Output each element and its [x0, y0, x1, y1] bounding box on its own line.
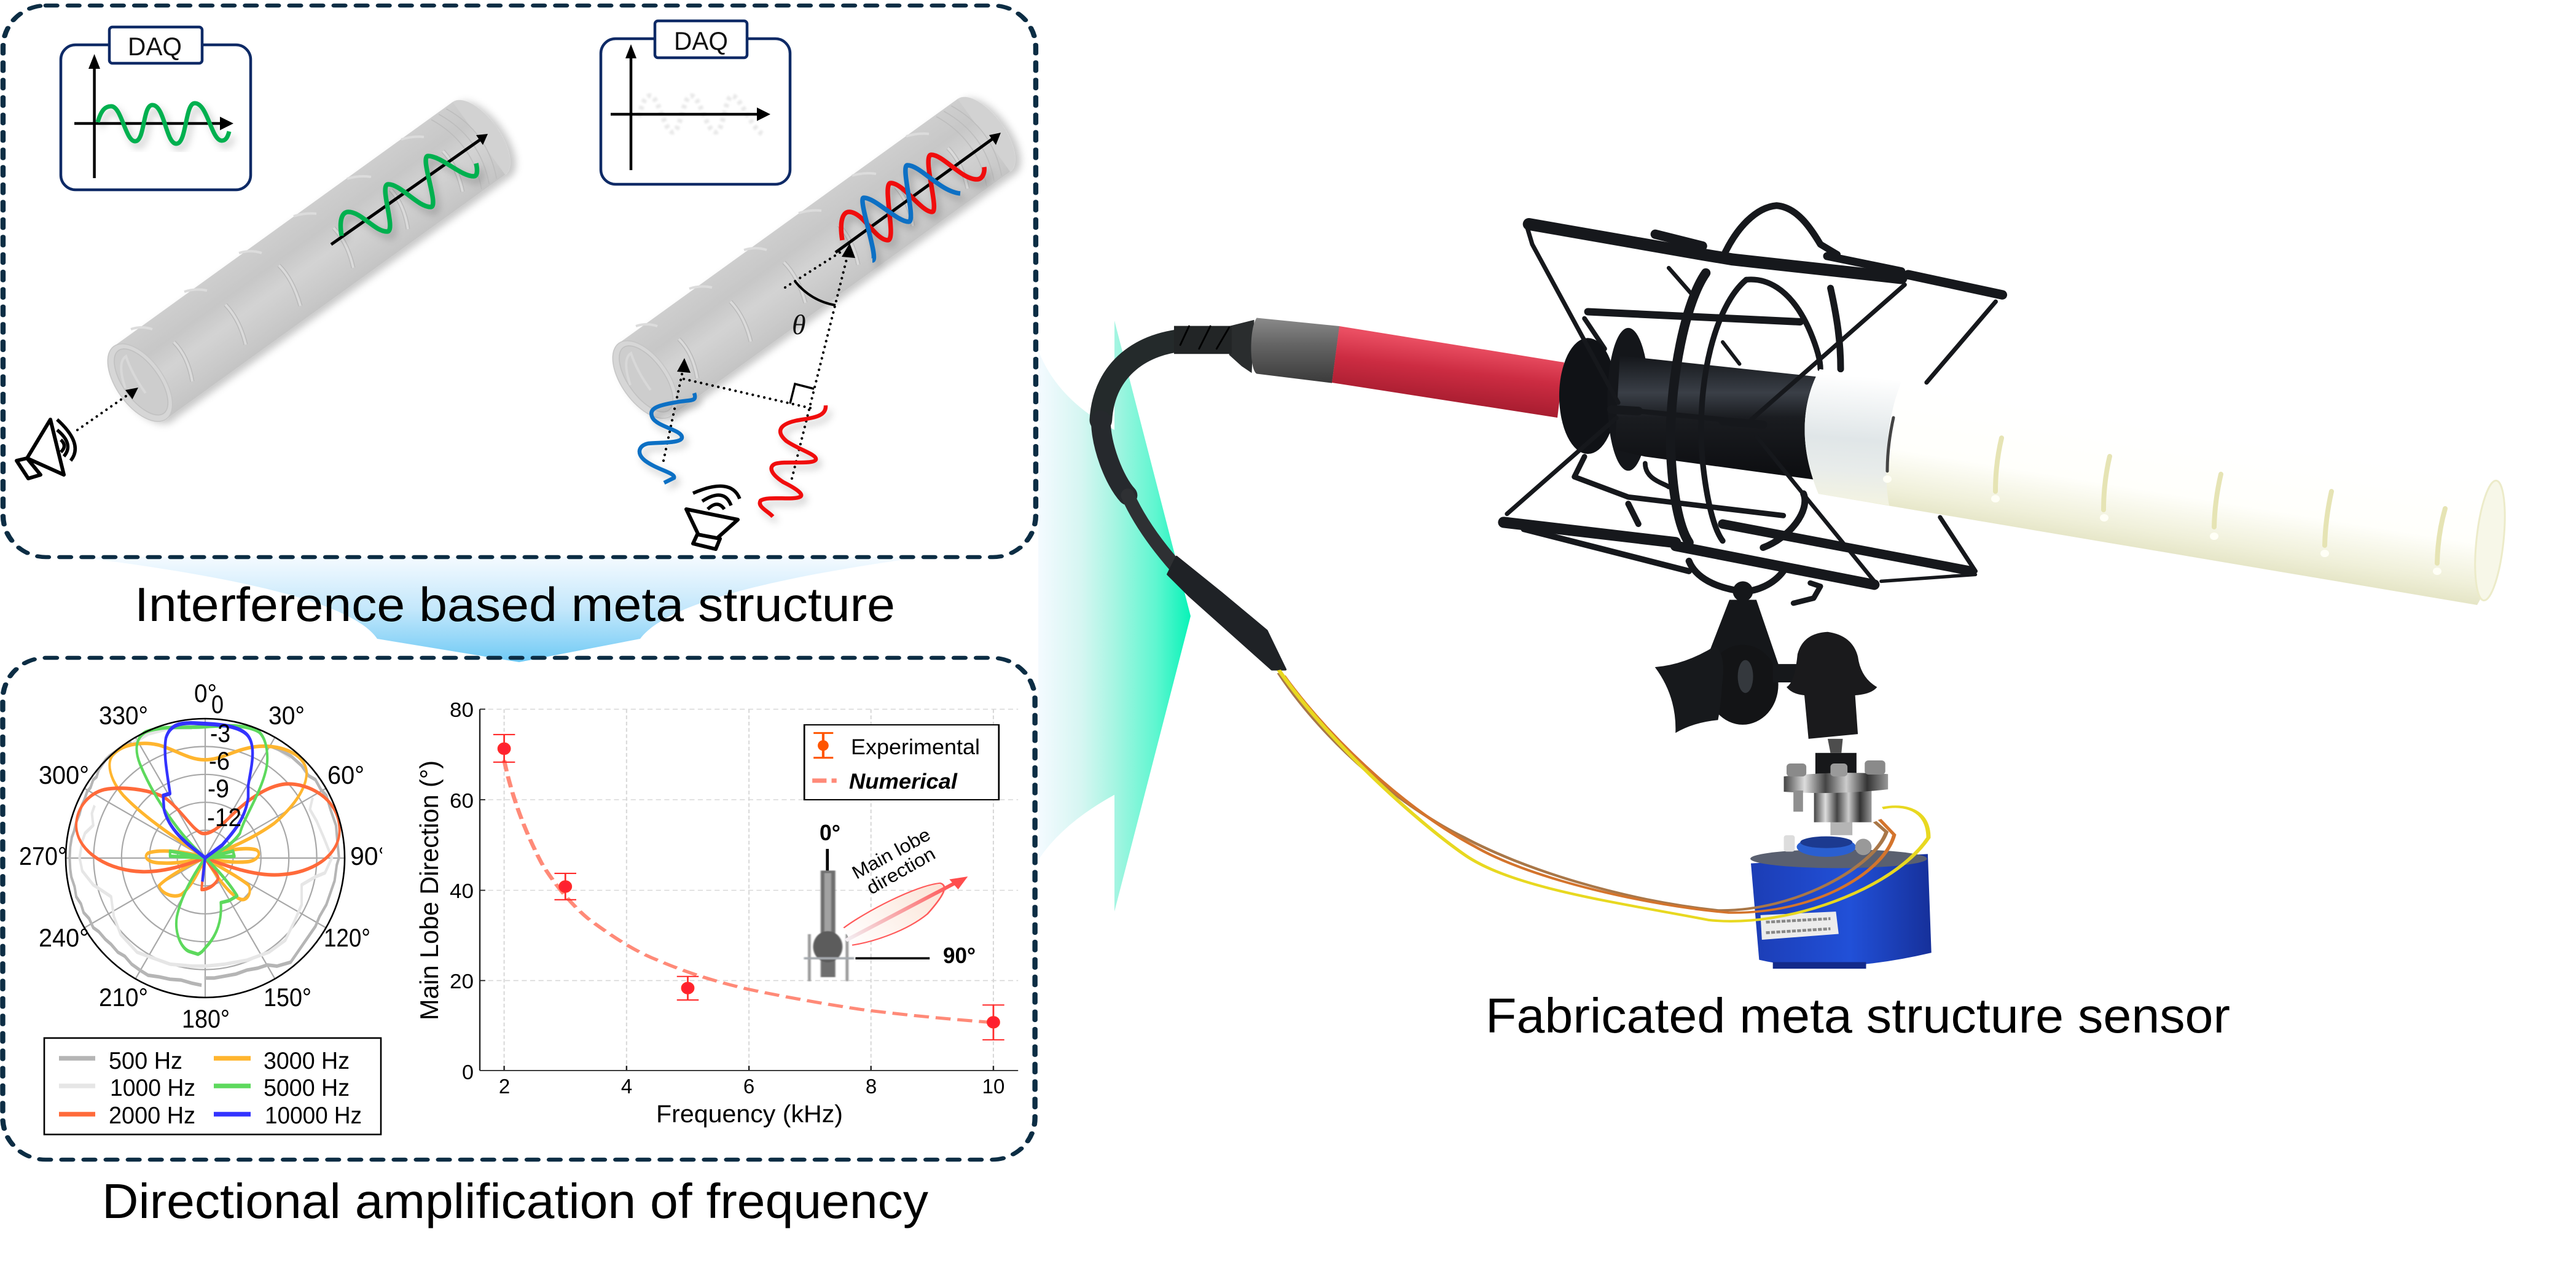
sensor wires — [1279, 670, 1928, 921]
speaker left and dotted arrow — [17, 388, 138, 478]
rear shock mount bars — [1524, 234, 1995, 581]
panel border bottom — [2, 658, 1035, 1160]
curve 1000 Hz — [79, 728, 332, 966]
white tube — [1805, 369, 2510, 605]
inset labels: 90° — [943, 943, 976, 968]
green signal in DAQ — [98, 103, 229, 144]
scatter x tick labels: 8 — [866, 1075, 877, 1098]
panel: interference based meta structure — [3, 6, 1036, 557]
green wave on tube — [340, 156, 477, 236]
polar tick labels: 150° — [264, 983, 311, 1012]
black housing — [1559, 328, 1824, 480]
polar legend: 3000 Hz — [264, 1048, 350, 1074]
funnel arrow: top panel to bottom panel — [80, 557, 922, 662]
scatter x tick labels — [499, 1075, 1004, 1098]
cable — [1101, 326, 1286, 670]
heading: interference based meta structure: Interference based meta structure — [135, 577, 895, 631]
dotted geometry and angle — [664, 243, 855, 478]
polar legend: 10000 Hz — [265, 1103, 362, 1129]
cancelled signal in DAQ — [639, 96, 765, 135]
legend text: Experimental — [851, 735, 980, 759]
scatter y tick labels: 20 — [450, 970, 474, 993]
blue incident wave — [640, 393, 695, 483]
scatter x tick labels: 10 — [982, 1075, 1004, 1098]
DAQ label left: DAQ — [128, 32, 182, 61]
polar outer circle — [66, 719, 345, 997]
red body — [1332, 326, 1564, 418]
polar chart — [19, 679, 388, 1134]
DAQ box right — [601, 21, 790, 184]
inset labels — [820, 820, 976, 968]
polar legend: 500 Hz — [109, 1048, 182, 1074]
icon: speaker right — [686, 486, 740, 549]
scatter y tick labels: 0 — [462, 1061, 474, 1083]
polar tick labels: 30° — [268, 701, 305, 730]
polar tick labels: -3 — [210, 719, 230, 748]
tube slots — [1887, 418, 2445, 563]
inset labels: 0° — [820, 820, 840, 845]
arrow through right tube — [836, 133, 1001, 252]
big arrow: panels to fabricated sensor — [1038, 321, 1191, 912]
DAQ label left — [109, 27, 202, 63]
polar tick labels: 300° — [39, 760, 89, 789]
slots right — [626, 134, 968, 390]
scatter chart: main lobe direction vs frequency — [415, 698, 1018, 1128]
DAQ label right — [655, 21, 747, 58]
inset labels: direction — [863, 843, 939, 899]
scatter y tick labels: 40 — [450, 880, 474, 902]
silver stem and blue collar — [1784, 821, 1871, 857]
scatter legend box — [804, 725, 999, 800]
x axis title: Frequency (kHz) — [656, 1101, 843, 1128]
polar tick labels — [19, 679, 388, 1033]
photo: fabricated meta structure sensor — [1101, 206, 2510, 969]
scatter x tick labels: 6 — [743, 1075, 754, 1098]
polar tick labels: 60° — [327, 760, 364, 789]
dome knob — [1787, 632, 1877, 739]
polar tick labels: 270° — [19, 841, 67, 870]
heading: fabricated meta structure sensor: Fabricated meta structure sensor — [1486, 988, 2230, 1043]
polar tick labels: 0° — [194, 679, 217, 708]
polar curves — [69, 723, 340, 985]
curve 2000 Hz — [76, 784, 340, 889]
numerical fit curve — [504, 760, 993, 1023]
polar legend — [44, 1038, 381, 1134]
DAQ box left — [61, 27, 251, 190]
polar tick labels: 240° — [39, 923, 89, 952]
stem — [1828, 739, 1843, 753]
axes right — [611, 44, 770, 170]
slots left — [121, 136, 463, 393]
experimental points — [493, 735, 1004, 1040]
scatter y tick labels: 80 — [450, 698, 474, 721]
cylinder right — [600, 87, 1027, 429]
polar grid — [66, 719, 345, 997]
polar tick labels: -12 — [207, 803, 241, 832]
blue wave on tube — [863, 165, 960, 260]
icon: speaker left — [17, 420, 75, 478]
inset microphone — [804, 870, 854, 981]
arrow through left tube — [331, 134, 488, 244]
scatter axes — [480, 709, 1018, 1071]
polar tick labels: 330° — [99, 701, 148, 730]
curve 500 Hz — [69, 743, 339, 985]
scatter x tick labels: 2 — [499, 1075, 510, 1098]
theta label: θ — [792, 309, 806, 340]
curve 5000 Hz — [136, 726, 267, 955]
front shock mount — [1503, 206, 2002, 669]
star knob — [1655, 645, 1798, 733]
red incident wave — [760, 405, 826, 517]
inset labels: Main lobe — [849, 824, 934, 883]
bracket — [1709, 581, 1780, 669]
inset main lobe — [844, 876, 968, 945]
polar legend: 2000 Hz — [109, 1103, 195, 1129]
polar tick labels: -9 — [208, 774, 229, 803]
curve 10000 Hz — [163, 723, 253, 881]
curve 3000 Hz — [109, 743, 307, 900]
scatter x tick labels: 4 — [621, 1075, 632, 1098]
axes left — [74, 54, 233, 178]
y axis title: Main Lobe Direction (°) — [415, 760, 444, 1020]
panel: directional amplification — [2, 658, 1035, 1160]
metal clamp — [1784, 753, 1888, 822]
blue cylinder — [1750, 849, 1932, 969]
red wave on tube — [841, 155, 984, 240]
polar tick labels: -6 — [209, 746, 230, 775]
polar tick labels: 180° — [182, 1004, 230, 1033]
legend text — [849, 735, 980, 794]
heading: directional amplification of frequency: Directional amplification of frequency — [102, 1174, 928, 1228]
scatter y tick labels: 60 — [450, 789, 474, 812]
polar tick labels: 120° — [324, 923, 370, 952]
grey connector and strain relief — [1229, 318, 1339, 383]
legend text: Numerical — [849, 770, 958, 794]
taped cable section — [1168, 556, 1286, 670]
polar tick labels: 90° — [350, 841, 388, 870]
polar legend: 1000 Hz — [110, 1075, 195, 1101]
cylinder left — [95, 90, 522, 432]
DAQ label right: DAQ — [674, 26, 728, 55]
polar tick labels: 0 — [211, 690, 224, 719]
polar legend: 5000 Hz — [264, 1075, 350, 1101]
panel border top — [3, 6, 1036, 557]
scatter y tick labels — [450, 698, 474, 1083]
inset direction lines — [828, 849, 930, 958]
scatter grid — [480, 709, 1018, 1071]
polar tick labels: 210° — [99, 983, 148, 1012]
